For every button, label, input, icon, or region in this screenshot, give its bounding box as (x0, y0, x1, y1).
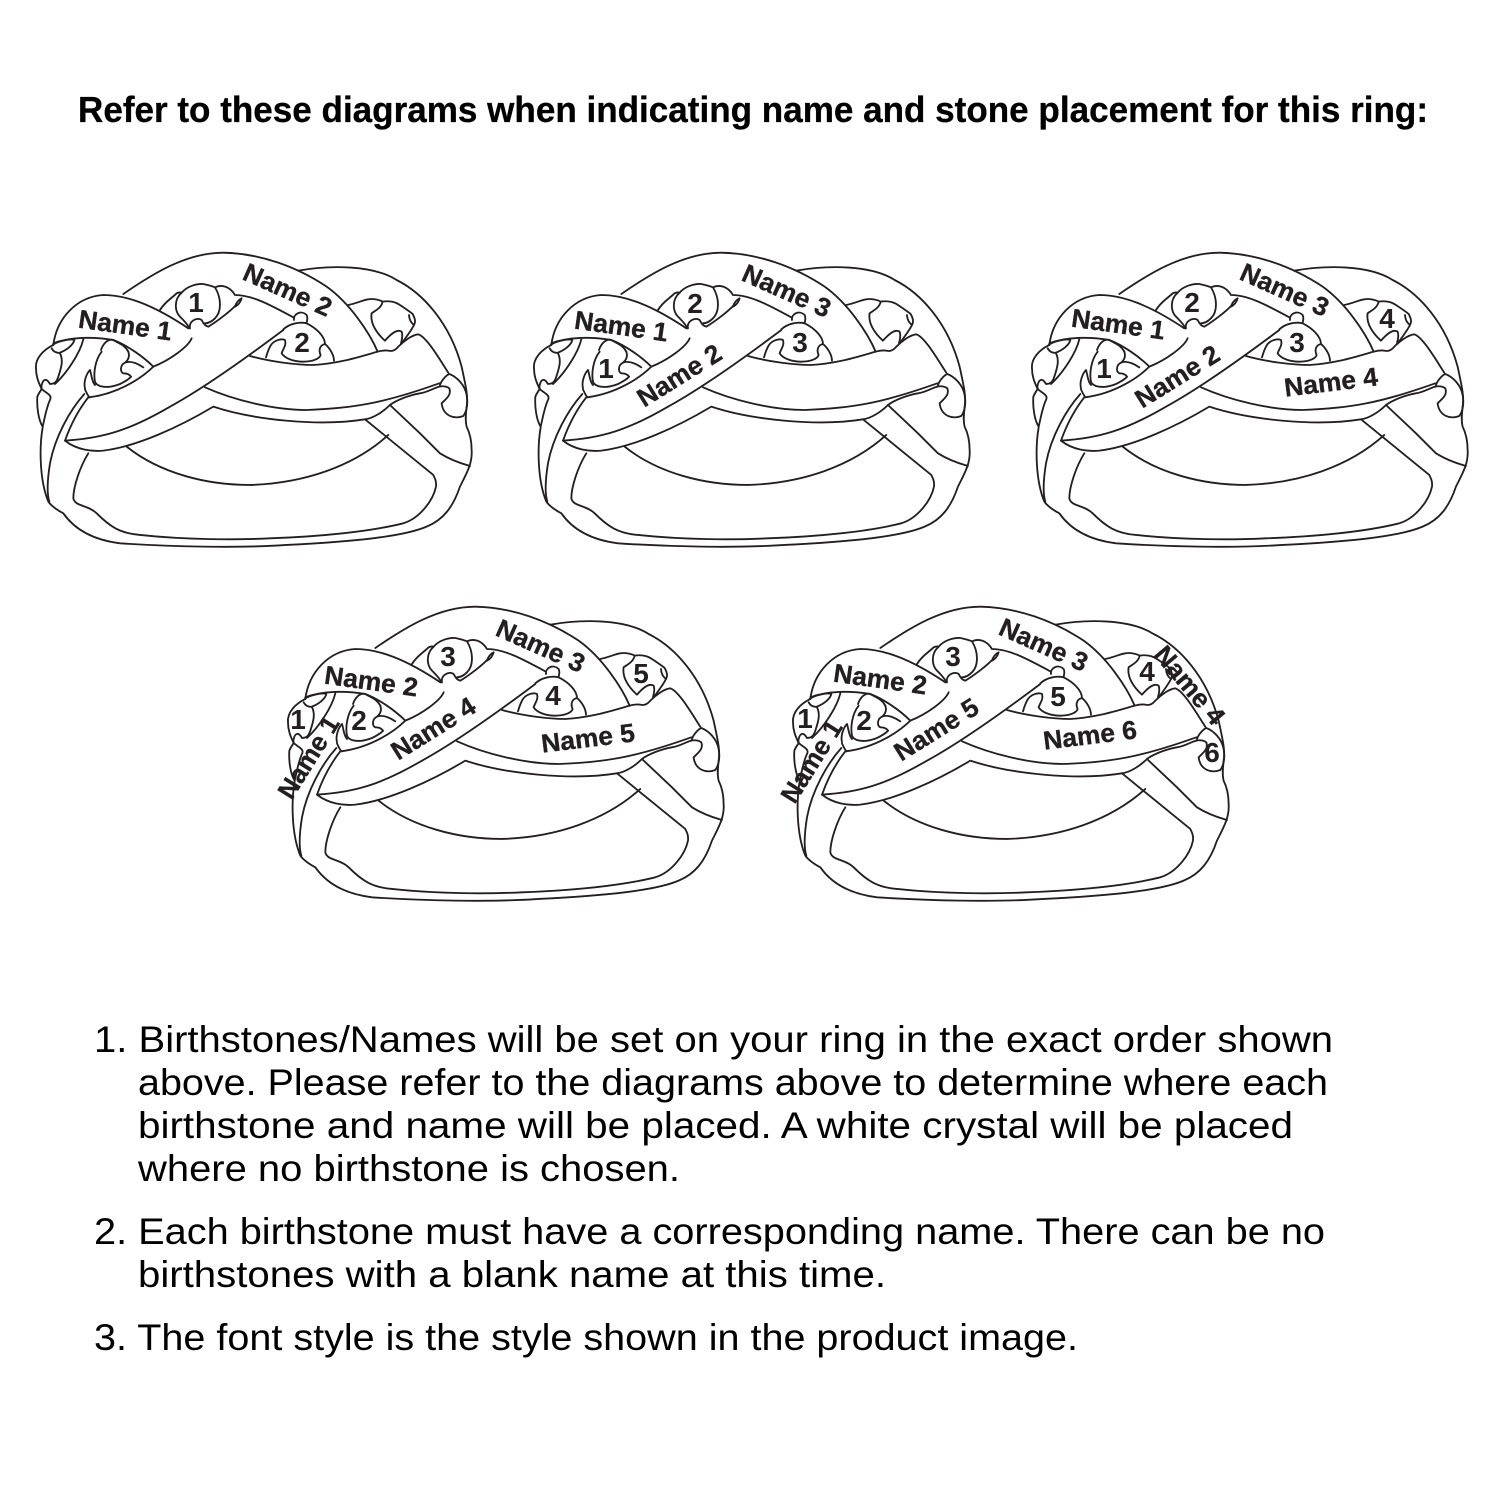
name and stone labels 3: Name 2 (1129, 339, 1225, 414)
name and stone labels 5: 3 (945, 641, 961, 672)
name and stone labels 2: 2 (687, 288, 703, 319)
name and stone labels 3 (1070, 257, 1395, 414)
ring outline 1 (36, 253, 472, 547)
name and stone labels 4: Name 5 (539, 717, 636, 759)
name and stone labels 5 (774, 612, 1232, 808)
name and stone labels 5: Name 1 (774, 714, 848, 808)
diagram: ring with 4 names (1032, 253, 1468, 547)
name and stone labels 3: 3 (1289, 327, 1305, 358)
diagram: ring with 6 names (774, 607, 1232, 901)
name and stone labels 2: Name 3 (738, 258, 836, 324)
name and stone labels 5: Name 4 (1148, 640, 1232, 731)
name and stone labels 1: 2 (294, 327, 310, 358)
name and stone labels 3: 4 (1379, 303, 1395, 334)
name and stone labels 4: Name 3 (492, 613, 590, 679)
name and stone labels 4: Name 4 (385, 690, 482, 766)
name and stone labels 4: 4 (545, 680, 561, 711)
name and stone labels 5: 1 (797, 703, 813, 734)
instruction 3: 3. The font style is the style shown in the product image. (94, 1316, 1078, 1358)
instruction 1: above. Please refer to the diagrams above to determine where each (138, 1061, 1328, 1103)
title: Refer to these diagrams when indicating name and stone placement for this ring: (78, 89, 1428, 130)
name and stone labels 5: Name 5 (888, 692, 984, 767)
name and stone labels 2: Name 1 (573, 305, 670, 347)
name and stone labels 5: Name 3 (995, 612, 1093, 678)
name and stone labels 3: Name 1 (1070, 303, 1167, 345)
name and stone labels 4: 3 (440, 641, 456, 672)
ring outline 2 (534, 253, 970, 547)
name and stone labels 1 (77, 257, 337, 358)
name and stone labels 1: Name 1 (77, 304, 174, 346)
diagram: ring with 5 names (271, 607, 724, 901)
name and stone labels 5: Name 6 (1041, 714, 1138, 756)
name and stone labels 3: Name 4 (1282, 361, 1380, 403)
instruction 1: birthstone and name will be placed. A white crystal will be placed (138, 1104, 1293, 1146)
name and stone labels 5: Name 2 (832, 658, 929, 700)
diagram: ring with 2 names (36, 253, 472, 547)
instruction 2: 2. Each birthstone must have a corresponding name. There can be no (94, 1210, 1325, 1252)
name and stone labels 4: 1 (290, 704, 306, 735)
instructions list (94, 1018, 1333, 1358)
diagram: ring with 3 names (534, 253, 970, 547)
ring outline 4 (288, 607, 724, 901)
name and stone labels 2: 3 (792, 327, 808, 358)
name and stone labels 5: 6 (1204, 737, 1220, 768)
name and stone labels 4: Name 1 (271, 710, 345, 804)
name and stone labels 4: Name 2 (323, 660, 420, 702)
name and stone labels 4: 5 (633, 658, 649, 689)
ring outline 5 (793, 607, 1229, 901)
name and stone labels 1: 1 (188, 287, 204, 318)
name and stone labels 4 (271, 613, 649, 804)
instruction 2: birthstones with a blank name at this time. (138, 1253, 886, 1295)
instruction 2 (94, 1210, 1325, 1295)
name and stone labels 4: 2 (351, 705, 367, 736)
name and stone labels 5: 2 (856, 705, 872, 736)
name and stone labels 5: 4 (1139, 656, 1155, 687)
instruction 1 (94, 1018, 1333, 1189)
name and stone labels 3: 2 (1184, 287, 1200, 318)
name and stone labels 5: 5 (1050, 681, 1066, 712)
instruction 1: where no birthstone is chosen. (137, 1147, 680, 1189)
name and stone labels 2: Name 2 (631, 338, 727, 413)
name and stone labels 1: Name 2 (239, 257, 337, 323)
instruction 1: 1. Birthstones/Names will be set on your ring in the exact order shown (94, 1018, 1333, 1060)
name and stone labels 3: 1 (1096, 353, 1112, 384)
ring outline 3 (1032, 253, 1468, 547)
name and stone labels 2: 1 (598, 353, 614, 384)
name and stone labels 2 (573, 258, 836, 413)
name and stone labels 3: Name 3 (1236, 257, 1334, 323)
